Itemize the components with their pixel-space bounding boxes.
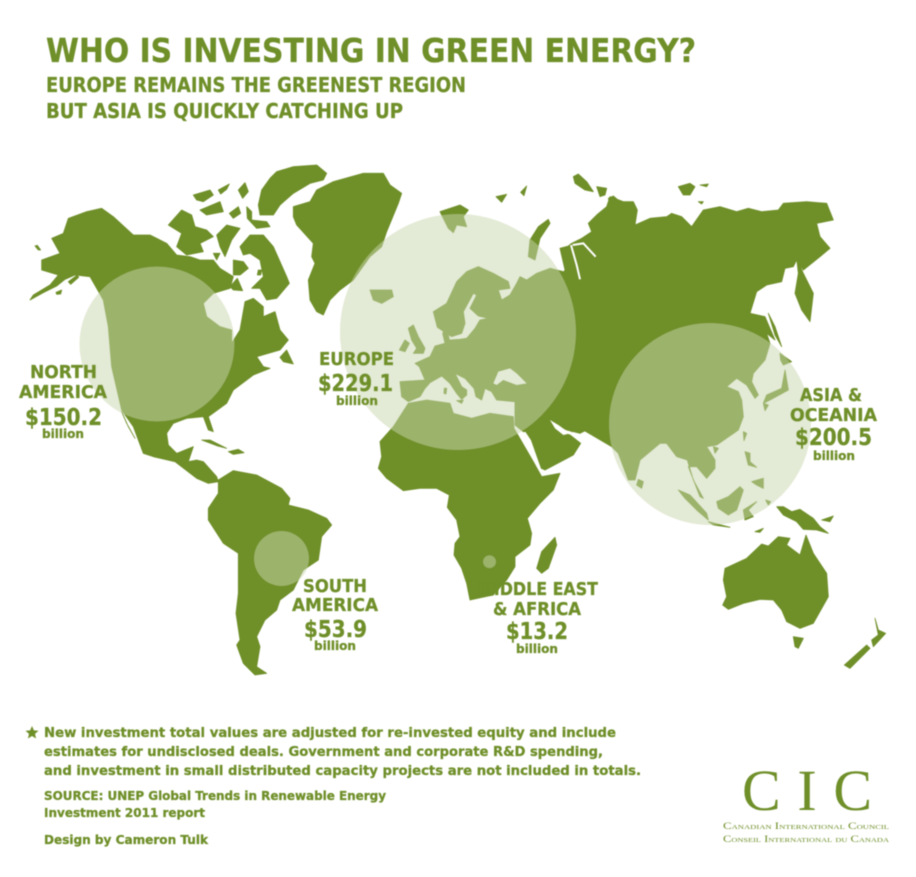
label: europe: EUROPE: [319, 349, 394, 370]
title block: [46, 31, 696, 123]
land: east asia islands: [637, 353, 792, 527]
label: north america: [19, 362, 107, 441]
land: europe: [370, 267, 590, 432]
land: russia and asia: [440, 174, 833, 498]
world map: [30, 165, 886, 675]
circle: asia and oceania: [609, 323, 811, 525]
title block: BUT ASIA IS QUICKLY CATCHING UP: [46, 99, 403, 123]
label: europe: $229.1: [318, 371, 393, 397]
label: south america: $53.9: [304, 617, 367, 643]
label: south america: SOUTH: [303, 576, 367, 597]
circle: south america: [254, 531, 309, 586]
land: north america and arctic islands: [30, 165, 402, 483]
footnote text: [44, 725, 641, 779]
label: middle east and africa: MIDDLE EAST: [478, 579, 599, 600]
title block: EUROPE REMAINS THE GREENEST REGION: [46, 73, 466, 97]
icon: footnote star: [26, 726, 38, 738]
footnote text: estimates for undisclosed deals. Government and corporate R&D spending,: [44, 744, 603, 760]
label: europe: billion: [336, 394, 378, 408]
logo: CIC: CIC: [742, 758, 872, 823]
label: asia and oceania: ASIA &: [800, 385, 862, 406]
label: asia and oceania: OCEANIA: [790, 405, 877, 426]
label: middle east and africa: billion: [516, 642, 558, 656]
label: south america: AMERICA: [292, 595, 378, 616]
label: north america: NORTH: [30, 362, 97, 383]
label: middle east and africa: [478, 579, 599, 656]
footnote text: New investment total values are adjusted for re-invested equity and include: [44, 725, 616, 741]
footnote text: and investment in small distributed capacity projects are not included in totals.: [44, 763, 641, 779]
label: asia and oceania: billion: [813, 449, 855, 463]
label: south america: [292, 576, 378, 653]
source text: Investment 2011 report: [44, 806, 205, 820]
circle: europe: [340, 214, 576, 450]
circle: middle east and africa: [483, 555, 496, 568]
source text: [44, 789, 386, 820]
circle: north america: [80, 266, 234, 422]
label: asia and oceania: $200.5: [795, 425, 872, 451]
source text: SOURCE: UNEP Global Trends in Renewable Energy: [44, 789, 386, 803]
logo: CIC: [723, 758, 890, 844]
land: central america and south america: [202, 440, 332, 675]
label: middle east and africa: $13.2: [506, 619, 568, 645]
label: north america: billion: [42, 427, 84, 441]
logo: CIC: Conseil International du Canada: [723, 834, 890, 844]
land: oceania: [723, 507, 886, 668]
land: africa, arabia, madagascar: [378, 380, 593, 600]
label: europe: [318, 349, 394, 408]
design credit: Design by Cameron Tulk: [44, 833, 209, 847]
label: north america: AMERICA: [19, 382, 107, 403]
seas: black sea, persian gulf, white sea cuts: [493, 243, 596, 435]
label: north america: $150.2: [25, 405, 102, 431]
label: asia and oceania: [790, 385, 877, 463]
label: middle east and africa: & AFRICA: [493, 599, 581, 620]
label: south america: billion: [314, 639, 356, 653]
title block: WHO IS INVESTING IN GREEN ENERGY?: [46, 31, 696, 70]
logo: CIC: Canadian International Council: [723, 821, 889, 831]
